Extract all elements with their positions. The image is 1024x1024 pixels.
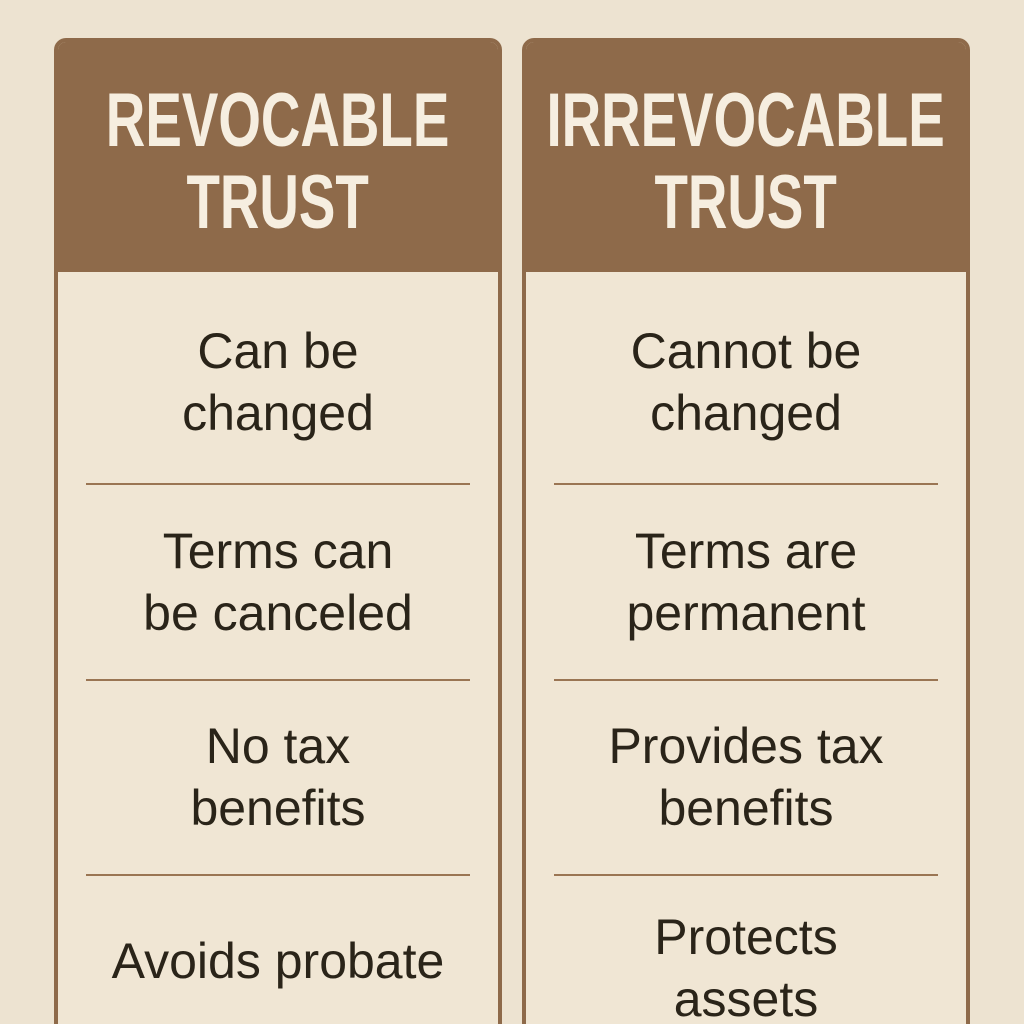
- header: revocable: [58, 42, 498, 272]
- text: provides tax benefits: [608, 718, 884, 836]
- text: provides tax benefits: Provides tax: [608, 718, 884, 774]
- panel: revocable trust: [54, 38, 502, 1024]
- text: can be changed: Can be: [197, 323, 359, 379]
- header: irrevocable: IRREVOCABLE: [547, 78, 945, 163]
- text: terms are permanent: [626, 523, 866, 641]
- header: irrevocable: [526, 42, 966, 272]
- text: cannot be changed: Cannot be: [631, 323, 861, 379]
- text: terms can be canceled: [143, 523, 413, 641]
- text: cannot be changed: changed: [650, 385, 842, 441]
- text: terms can be canceled: Terms can: [163, 523, 393, 579]
- text: protects assets: [654, 909, 838, 1024]
- header: revocable: REVOCABLE: [106, 78, 450, 163]
- text: protects assets: Protects: [654, 909, 838, 965]
- header: revocable: TRUST: [187, 160, 369, 245]
- header: irrevocable: TRUST: [655, 160, 837, 245]
- panel: irrevocable trust: [522, 38, 970, 1024]
- text: cannot be changed: [631, 323, 861, 441]
- text: avoids probate: Avoids probate: [112, 933, 444, 989]
- text: can be changed: [182, 323, 374, 441]
- text: no tax benefits: [190, 718, 366, 836]
- text: terms are permanent: permanent: [626, 585, 866, 641]
- text: no tax benefits: No tax: [206, 718, 350, 774]
- text: can be changed: changed: [182, 385, 374, 441]
- text: terms are permanent: Terms are: [635, 523, 857, 579]
- text: no tax benefits: benefits: [190, 780, 366, 836]
- text: terms can be canceled: be canceled: [143, 585, 413, 641]
- text: provides tax benefits: benefits: [658, 780, 834, 836]
